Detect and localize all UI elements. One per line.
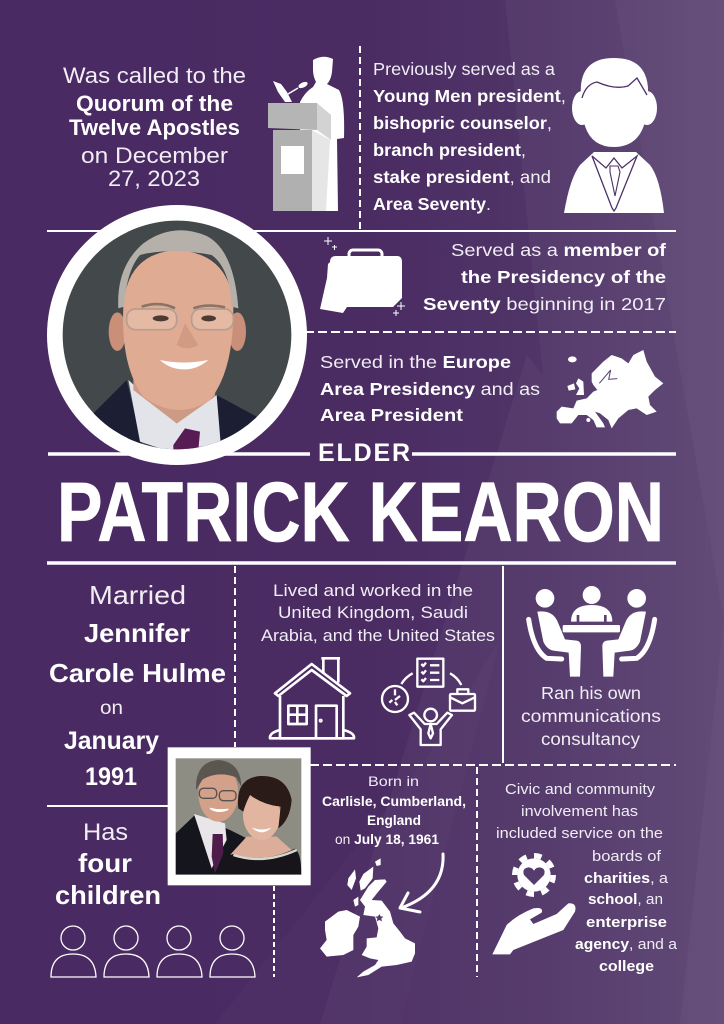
- text: previous callings: Previously served as a: [373, 59, 555, 79]
- icon: hand holding gear with heart: [492, 856, 575, 954]
- text: called to the Quorum: [63, 63, 246, 191]
- text: marriage: Jennifer: [84, 618, 190, 648]
- icon: people at meeting table: [529, 586, 655, 677]
- text: marriage: Carole Hulme: [49, 658, 226, 688]
- text: marriage: Married: [89, 580, 186, 610]
- text: four children: four: [78, 848, 132, 878]
- text: previous callings: stake president , and: [373, 167, 551, 187]
- text: marriage: [49, 580, 226, 791]
- text: birth: on July 18, 1961: [335, 831, 439, 847]
- text: civic involvement: Civic and community: [505, 781, 656, 798]
- text: Europe Area Presidency: [320, 352, 540, 425]
- text: lived and worked: United Kingdom, Saudi: [278, 603, 468, 622]
- arrow: to birthplace: [400, 854, 443, 912]
- text: previous callings: Area Seventy.: [373, 194, 491, 214]
- text: marriage: January: [64, 727, 159, 755]
- text: Europe Area Presidency: Area Presidency and as: [320, 379, 540, 399]
- text: four children: Has: [83, 819, 128, 846]
- icon: map of Europe: [557, 350, 663, 428]
- text: communications consultancy: Ran his own: [541, 683, 641, 703]
- text: called to the Quorum: Quorum of the: [76, 91, 233, 116]
- text: four children: [55, 819, 161, 910]
- icon: briefcase: [320, 237, 405, 316]
- text: Presidency of the Seventy: Served as a member of: [451, 240, 666, 260]
- text: previous callings: [373, 59, 566, 214]
- text: birth: Born in: [368, 773, 419, 789]
- text: called to the Quorum: on December: [81, 143, 228, 168]
- text: marriage: 1991: [85, 763, 137, 791]
- text: Europe Area Presidency: Served in the Europe: [320, 352, 511, 372]
- text: civic involvement: involvement has: [521, 803, 638, 820]
- text: called to the Quorum: Twelve Apostles: [69, 115, 240, 140]
- text: communications consultancy: communications: [521, 706, 661, 726]
- text: communications consultancy: [521, 683, 661, 749]
- text: previous callings: branch president ,: [373, 140, 526, 160]
- text: civic involvement: charities , a: [584, 870, 669, 887]
- text: lived and worked: Arabia, and the United States: [261, 626, 495, 645]
- text: four children: children: [55, 880, 161, 910]
- text: Presidency of the Seventy: the Presidency of the: [461, 267, 666, 287]
- icon: speaker at podium: [268, 57, 344, 211]
- photo: couple in white frame: [168, 747, 311, 885]
- text: civic involvement: college: [599, 958, 654, 975]
- text: civic involvement: enterprise: [586, 914, 667, 931]
- text: Presidency of the Seventy: [423, 240, 666, 314]
- text: birth: Carlisle, Cumberland,: [322, 793, 466, 809]
- icon: man in suit: [564, 58, 664, 213]
- text: civic involvement: [496, 781, 678, 975]
- text: called to the Quorum: 27, 2023: [108, 166, 200, 191]
- text: Presidency of the Seventy: Seventy beginning in 2017: [423, 294, 666, 314]
- text: Europe Area Presidency: Area President: [320, 405, 463, 425]
- icon: house: [270, 658, 354, 738]
- icon: work and life cycle: [382, 659, 475, 745]
- text: lived and worked: Lived and worked in the: [273, 581, 473, 600]
- icon: four children figures: [51, 926, 255, 977]
- text: lived and worked: [261, 581, 495, 645]
- text: civic involvement: school, an: [588, 891, 663, 908]
- text: civic involvement: included service on the: [496, 825, 663, 842]
- text: civic involvement: boards of: [592, 848, 662, 865]
- portrait: Elder Kearon in circle: [47, 205, 307, 465]
- text: previous callings: Young Men president ,: [373, 86, 566, 106]
- text: marriage: on: [100, 698, 123, 719]
- text: birth: [322, 773, 466, 847]
- text: birth: England: [367, 812, 421, 828]
- text: previous callings: bishopric counselor ,: [373, 113, 552, 133]
- heading: Elder: ELDER: [318, 439, 410, 467]
- text: called to the Quorum: Was called to the: [63, 63, 246, 88]
- text: communications consultancy: consultancy: [541, 729, 640, 749]
- text: civic involvement: agency, and a: [575, 936, 678, 953]
- icon: map of British Isles: [320, 858, 415, 977]
